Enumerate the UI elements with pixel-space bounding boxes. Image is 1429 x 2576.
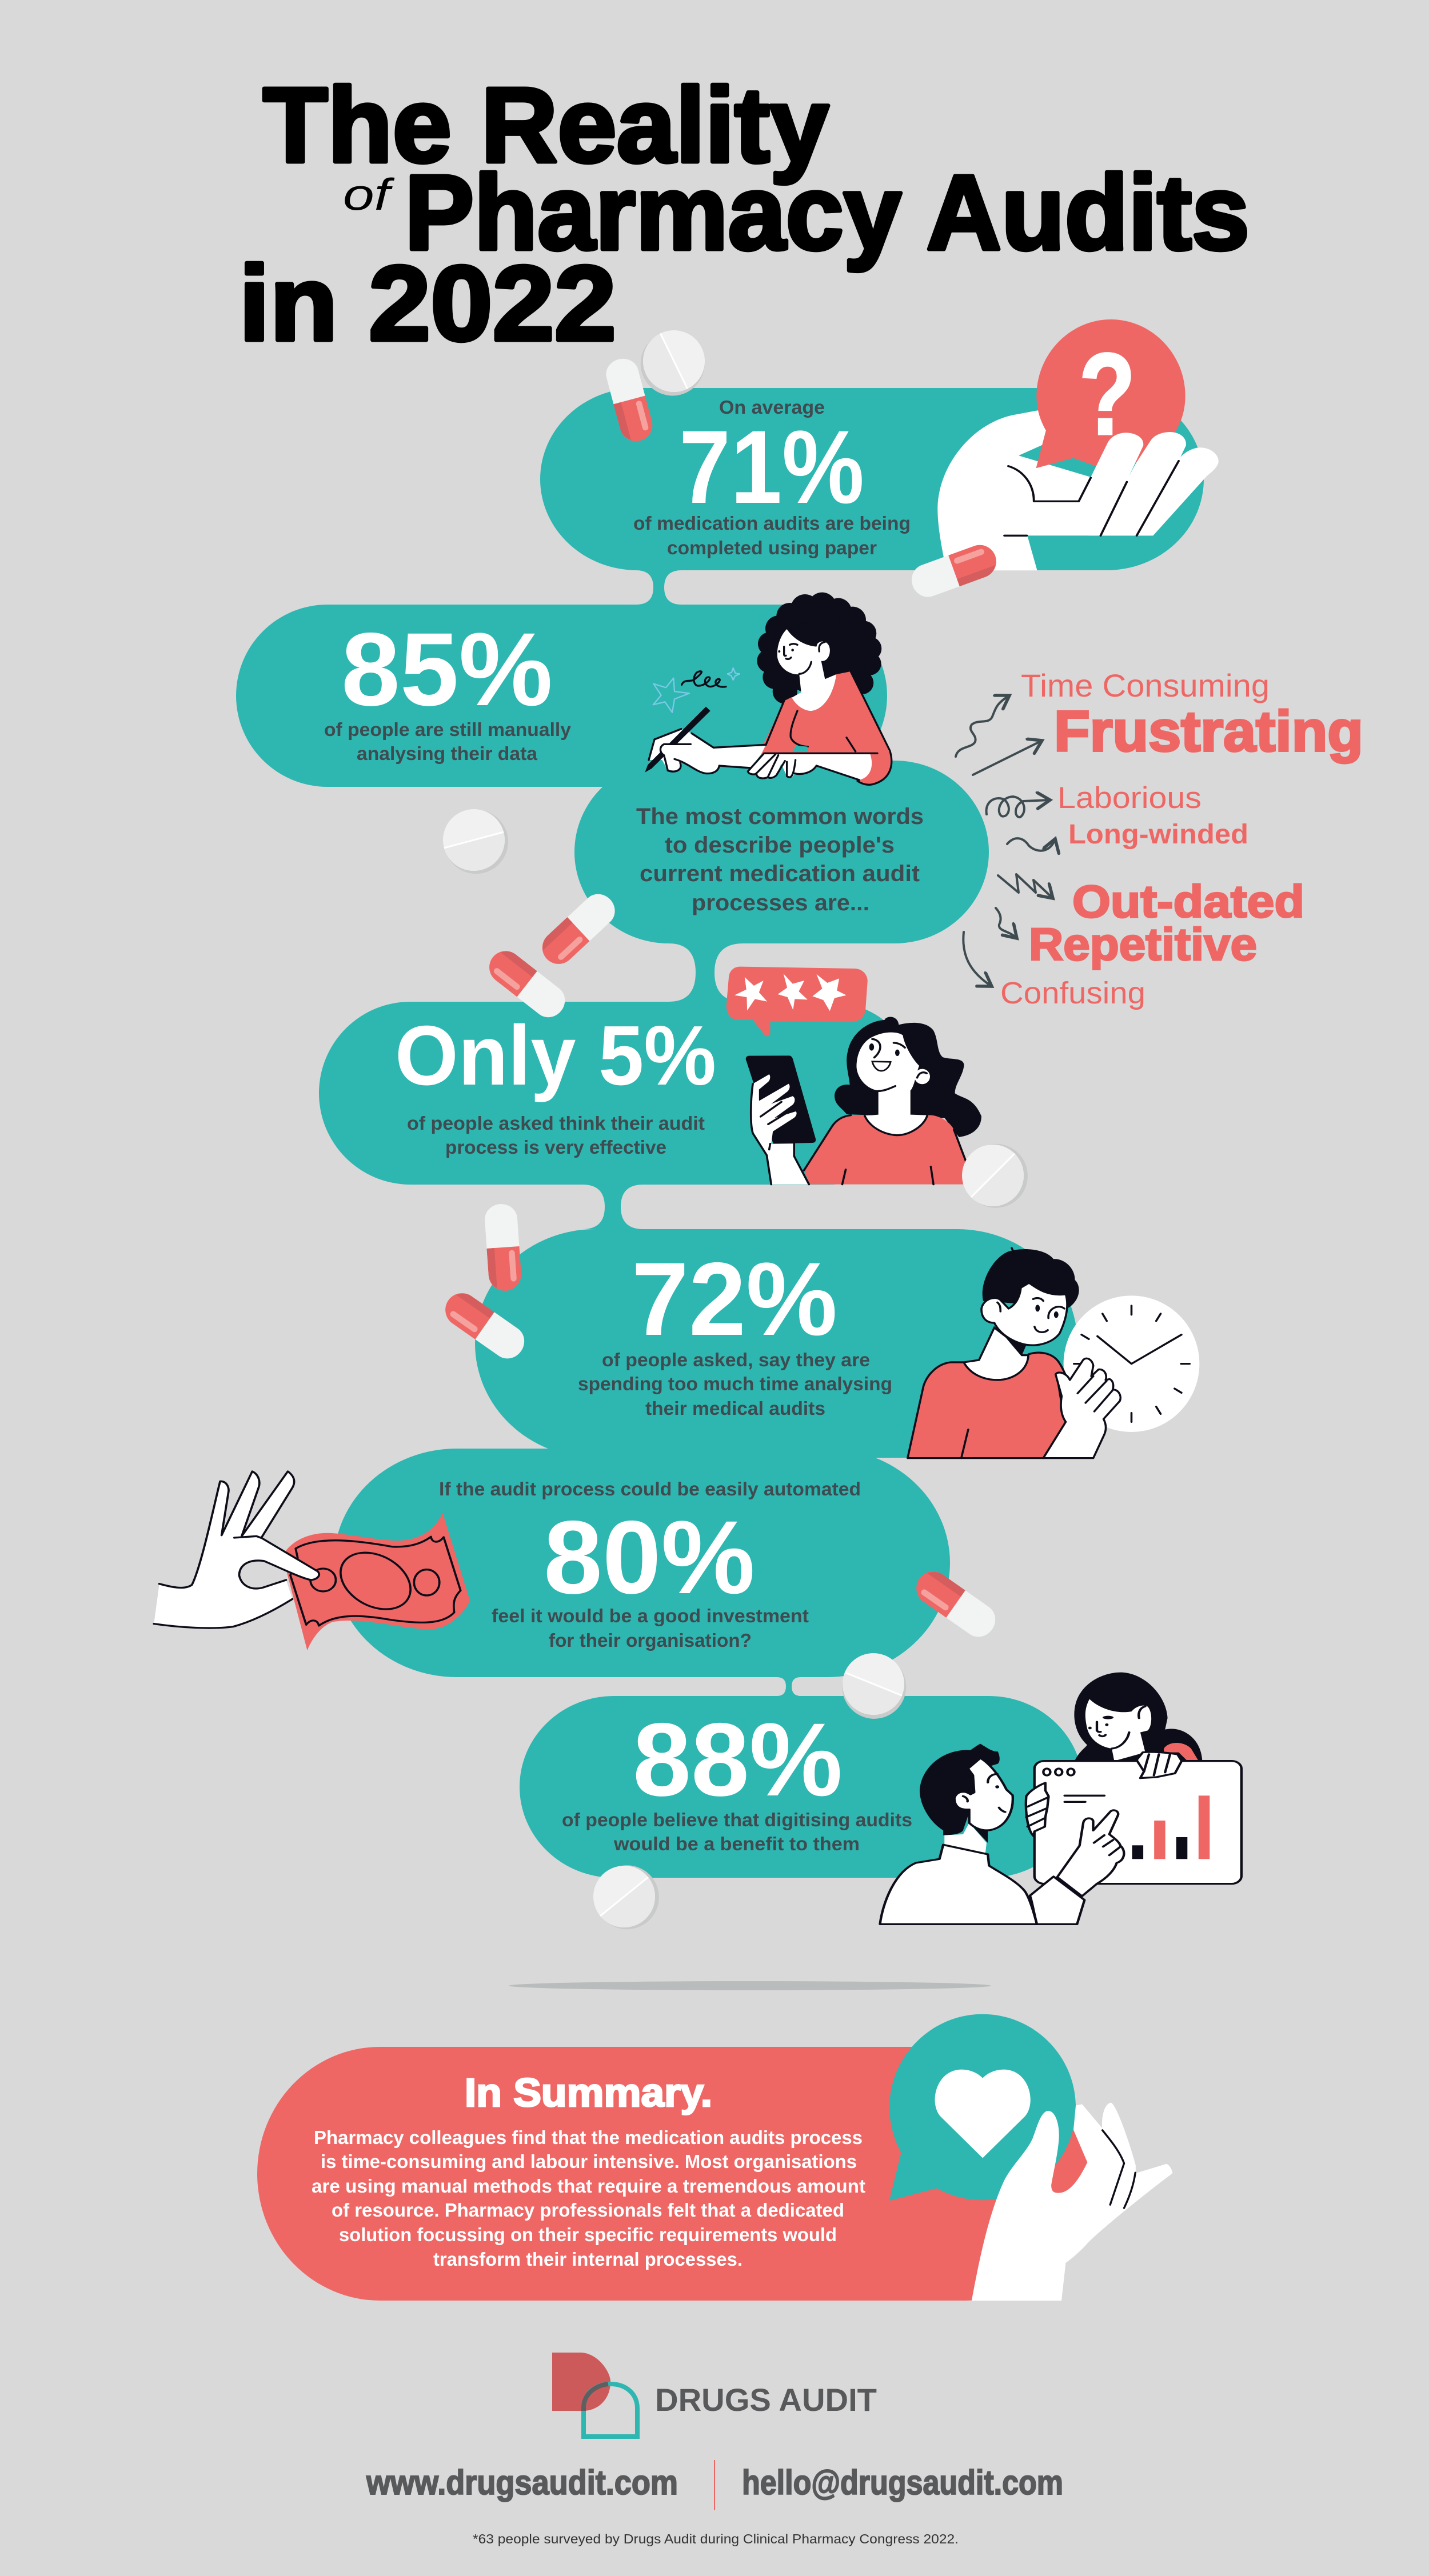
footnote: *63 people surveyed by Drugs Audit during Clinical Pharmacy Congress 2022. xyxy=(473,2531,959,2546)
stat: 71%: completed using paper xyxy=(667,537,877,558)
icon: hand holding question bubble xyxy=(937,319,1219,570)
stat: 71%: of medication audits are being xyxy=(633,513,911,534)
stat: only 5% xyxy=(395,1009,716,1158)
hair xyxy=(757,593,881,704)
icon: capsule xyxy=(907,541,1001,601)
stat: 72% xyxy=(578,1241,892,1419)
title: Pharmacy Audits xyxy=(405,154,1250,272)
panel: summary xyxy=(257,2047,1089,2301)
rating bubble xyxy=(727,967,868,1037)
icon: hand holding heart bubble xyxy=(889,2014,1172,2301)
logo xyxy=(552,2353,877,2437)
stat: 72%: spending too much time analysing xyxy=(578,1373,892,1394)
panel: common words intro xyxy=(636,804,924,915)
panel: common words intro: The most common words xyxy=(636,804,924,829)
panel: common words intro: processes are... xyxy=(692,890,869,915)
word cloud: Repetitive xyxy=(1029,919,1257,970)
banknote xyxy=(286,1513,470,1650)
summary text xyxy=(312,2070,865,2270)
stat: only 5%: process is very effective xyxy=(445,1137,666,1158)
summary text: solution focussing on their specific requirements would xyxy=(339,2224,837,2245)
stat: 71% xyxy=(633,397,911,558)
stat: 85% xyxy=(324,611,572,764)
stat: 80%: 80% xyxy=(544,1499,755,1615)
stat: 72%: their medical audits xyxy=(645,1398,825,1419)
word cloud: Out-dated xyxy=(1072,876,1304,927)
capsule xyxy=(439,1287,530,1365)
summary text: In Summary. xyxy=(465,2070,712,2115)
chart screen xyxy=(1035,1761,1242,1884)
stat: 71%: On average xyxy=(719,397,825,418)
summary text: is time-consuming and labour intensive. Most organisations xyxy=(321,2151,857,2172)
stat: 88%: of people believe that digitising audits xyxy=(562,1809,912,1830)
stat: 80%: for their organisation? xyxy=(549,1630,752,1651)
stat: only 5%: Only 5% xyxy=(395,1009,716,1103)
illustration: man with clock xyxy=(908,1248,1199,1458)
capsule and tablet near first panel xyxy=(602,320,716,445)
teal pill ribbon xyxy=(236,388,1204,1878)
shadow ellipse xyxy=(509,1981,991,1990)
panel: common words intro: to describe people's xyxy=(665,833,895,858)
tablet xyxy=(832,1644,916,1729)
stat: 85%: analysing their data xyxy=(357,743,538,764)
word cloud: Long-winded xyxy=(1068,819,1248,850)
contact details xyxy=(366,2460,1063,2510)
word cloud xyxy=(1000,667,1363,1010)
summary text: are using manual methods that require a tremendous amount xyxy=(312,2175,865,2197)
stat: 71%: 71% xyxy=(679,409,864,525)
stat: only 5%: of people asked think their audit xyxy=(407,1113,705,1134)
illustration: woman writing xyxy=(645,593,892,785)
illustration: hand holding banknote xyxy=(154,1471,470,1650)
stat: 72%: of people asked, say they are xyxy=(602,1349,870,1370)
capsule xyxy=(910,1565,1001,1643)
tablet xyxy=(949,1130,1041,1222)
question mark: ? xyxy=(1079,330,1136,459)
summary text: Pharmacy colleagues find that the medication audits process xyxy=(314,2127,863,2148)
contact details: www.drugsaudit.com xyxy=(366,2463,678,2502)
illustration: woman with phone and rating xyxy=(727,967,981,1185)
stat: 88%: would be a benefit to them xyxy=(613,1833,860,1854)
word cloud: Confusing xyxy=(1000,976,1145,1010)
capsule xyxy=(483,945,571,1023)
title: The Reality xyxy=(263,66,829,185)
stat: 88%: 88% xyxy=(633,1701,843,1818)
face details xyxy=(869,1039,905,1091)
arrows to words xyxy=(956,695,1055,986)
title: in 2022 xyxy=(239,245,616,363)
summary text: transform their internal processes. xyxy=(433,2249,743,2270)
title: of xyxy=(343,169,395,219)
logo: DRUGS AUDIT xyxy=(655,2382,877,2418)
summary text: of resource. Pharmacy professionals felt that a dedicated xyxy=(332,2199,844,2221)
stat: 72%: 72% xyxy=(632,1241,837,1357)
capsule xyxy=(484,1203,522,1292)
stat: 85%: of people are still manually xyxy=(324,719,572,740)
stat: 80% xyxy=(439,1478,861,1651)
capsule xyxy=(536,887,621,971)
tablet xyxy=(436,802,516,881)
word cloud: Laborious xyxy=(1057,781,1202,815)
stat: 88% xyxy=(562,1701,912,1854)
panel: common words intro: current medication audit xyxy=(640,861,920,886)
title xyxy=(239,66,1250,363)
stat: 80%: If the audit process could be easily automated xyxy=(439,1478,861,1499)
tablet xyxy=(581,1851,672,1943)
stat: 80%: feel it would be a good investment xyxy=(492,1605,809,1626)
clock xyxy=(1064,1295,1199,1432)
word cloud: Frustrating xyxy=(1054,699,1363,763)
contact details: hello@drugsaudit.com xyxy=(742,2463,1063,2502)
word cloud: Time Consuming xyxy=(1021,667,1270,703)
illustration: two people with chart xyxy=(880,1673,1242,1924)
stat: 85%: 85% xyxy=(341,611,553,727)
